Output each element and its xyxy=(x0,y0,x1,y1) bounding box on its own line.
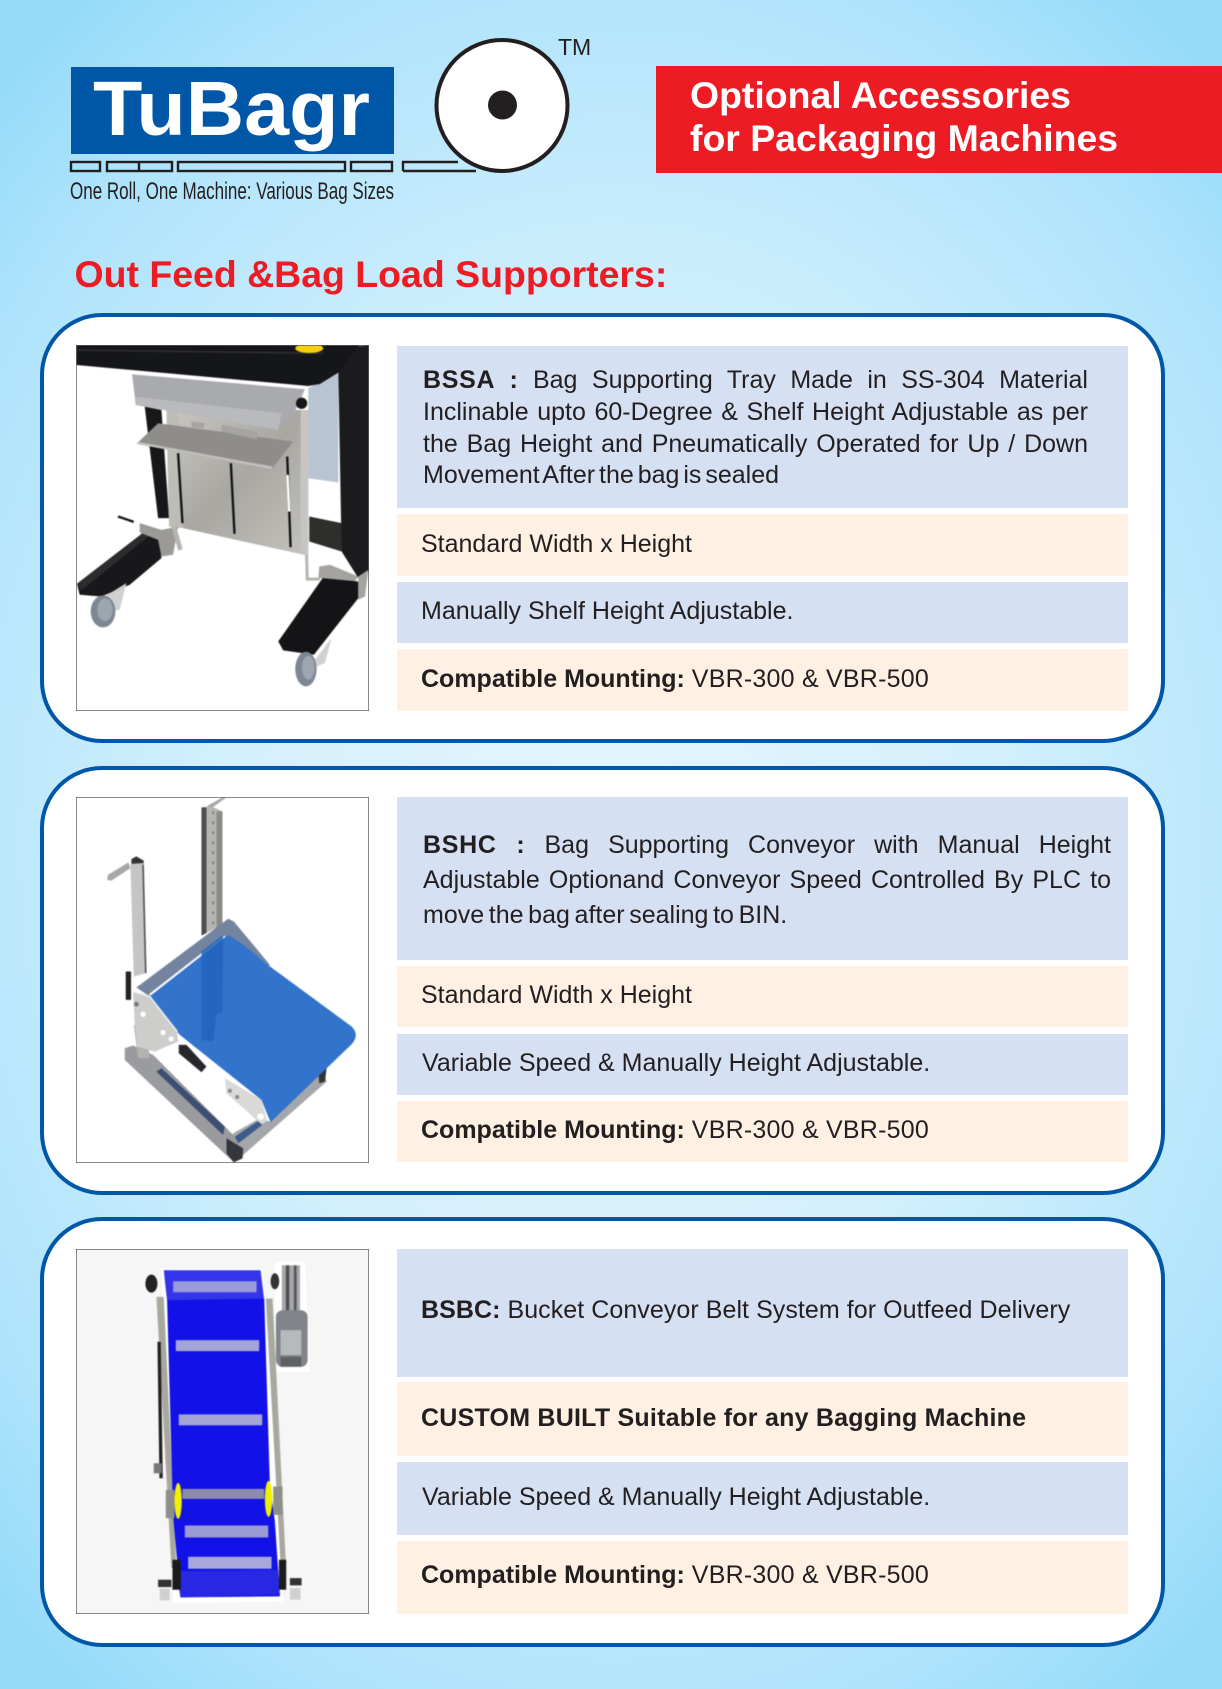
panel: BSBC bucket conveyor xyxy=(40,1217,1165,1647)
product image: BSSA tray on machine stand xyxy=(76,345,369,711)
BSBC description: BSBC: Bucket Conveyor Belt System for Outfeed Delivery xyxy=(421,1296,1070,1324)
BSSA size xyxy=(397,514,1128,576)
panel: BSHC bag supporting conveyor xyxy=(40,766,1165,1195)
BSSA description: BSSA : Bag Supporting Tray Made in SS-304 Material xyxy=(423,366,1088,394)
product image: BSHC blue conveyor xyxy=(76,797,369,1163)
title text xyxy=(690,74,1118,159)
BSBC adjustment: Variable Speed & Manually Height Adjustable. xyxy=(422,1483,930,1511)
BSHC size xyxy=(397,966,1128,1027)
section heading: Out Feed &Bag Load Supporters: xyxy=(74,253,667,295)
BSHC adjustment xyxy=(397,1034,1128,1095)
BSSA adjustment: Manually Shelf Height Adjustable. xyxy=(421,597,793,625)
logo bag outline strip xyxy=(71,162,476,171)
BSSA description xyxy=(397,346,1128,508)
BSHC description: Adjustable Optionand Conveyor Speed Controlled By PLC to xyxy=(423,866,1111,894)
BSBC compatibility xyxy=(397,1541,1128,1614)
logo blue box with name: TuBagr xyxy=(93,66,370,152)
BSBC description xyxy=(397,1249,1128,1377)
logo: TuBagr xyxy=(70,36,591,205)
BSSA compatibility: Compatible Mounting: VBR-300 & VBR-500 xyxy=(421,665,929,693)
title text: Optional Accessories xyxy=(690,74,1071,116)
BSBC custom built note: CUSTOM BUILT Suitable for any Bagging Machine xyxy=(421,1404,1026,1432)
BSHC description: move the bag after sealing to BIN. xyxy=(423,901,787,929)
BSSA description: Inclinable upto 60-Degree & Shelf Height Adjustable as per xyxy=(423,398,1088,426)
BSBC custom built note xyxy=(397,1382,1128,1456)
BSHC description: BSHC : Bag Supporting Conveyor with Manual Height xyxy=(423,831,1111,859)
BSSA size: Standard Width x Height xyxy=(421,530,692,558)
tagline: One Roll, One Machine: Various Bag Sizes xyxy=(70,178,394,205)
BSHC compatibility: Compatible Mounting: VBR-300 & VBR-500 xyxy=(421,1116,929,1144)
BSHC size: Standard Width x Height xyxy=(421,981,692,1009)
BSHC description xyxy=(397,797,1128,960)
title text: for Packaging Machines xyxy=(690,117,1118,159)
BSBC compatibility: Compatible Mounting: VBR-300 & VBR-500 xyxy=(421,1561,929,1589)
BSHC compatibility xyxy=(397,1101,1128,1162)
BSSA adjustment xyxy=(397,582,1128,643)
BSSA compatibility xyxy=(397,649,1128,711)
title banner xyxy=(656,66,1222,173)
BSBC adjustment xyxy=(397,1462,1128,1535)
BSSA description: Movement After the bag is sealed xyxy=(423,461,779,489)
panel: BSSA bag supporting tray xyxy=(40,313,1165,743)
product image: BSBC bucket conveyor belt xyxy=(76,1249,369,1614)
BSSA description: the Bag Height and Pneumatically Operated for Up / Down xyxy=(423,430,1088,458)
BSHC adjustment: Variable Speed & Manually Height Adjustable. xyxy=(422,1049,930,1077)
logo roll circle xyxy=(436,40,568,171)
